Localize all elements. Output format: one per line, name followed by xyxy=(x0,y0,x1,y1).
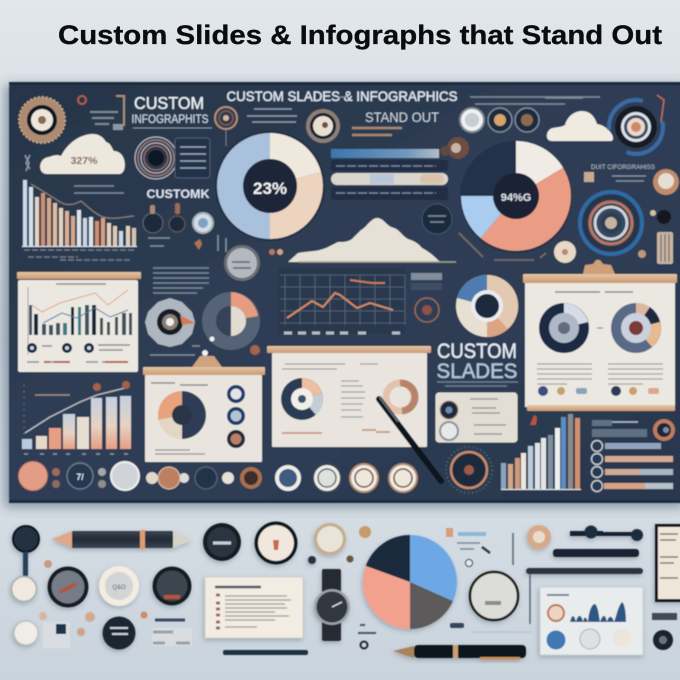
bottom badge row xyxy=(18,462,262,490)
ring badges xyxy=(274,464,417,492)
heading: custom infographics: CUSTOM xyxy=(134,93,204,113)
card: centre-left donut xyxy=(143,350,265,462)
tray: small bottom-right parts xyxy=(652,613,677,650)
mountain chart xyxy=(288,204,456,262)
data strip panel xyxy=(331,97,600,200)
heading: custom slides: SLADES xyxy=(436,360,518,383)
heading: custom slides: CUSTOM xyxy=(437,340,517,363)
donut chart: multi colour xyxy=(456,275,518,337)
tray: chart card xyxy=(540,587,643,655)
heading: custom slides & infographics: CUSTOM SLADES & INFOGRAPHICS xyxy=(226,89,458,104)
horizontal bars xyxy=(592,419,675,492)
chart label box xyxy=(411,273,442,290)
label: customk: CUSTOMK xyxy=(146,189,210,201)
icon: large ring dial xyxy=(306,109,340,143)
tray: magnifier lens xyxy=(470,572,518,620)
main donut chart 23%: 23% xyxy=(253,179,287,198)
tray: large fountain pen xyxy=(393,645,526,660)
card: centre donuts xyxy=(267,346,431,447)
text lines under heading xyxy=(247,109,297,122)
icon: ring xyxy=(415,298,439,322)
heading: custom infographics xyxy=(132,93,212,128)
tray: large dials xyxy=(48,522,346,650)
tray: tube xyxy=(52,530,192,549)
metal dial xyxy=(224,245,283,281)
bar chart: bottom left xyxy=(22,381,131,454)
cloud with percentage xyxy=(40,134,125,174)
heading: stand out: STAND OUT xyxy=(365,109,439,125)
line chart xyxy=(278,268,406,334)
small icon column xyxy=(148,235,226,252)
icon: copper ring dial xyxy=(215,107,237,146)
small connector marks xyxy=(459,233,546,260)
pen on card xyxy=(379,397,441,481)
cloud top right xyxy=(547,111,613,141)
label right of pie: DUIT CIFORGRAHISS xyxy=(591,164,656,171)
tray: text sheet xyxy=(205,577,303,638)
spiral dial xyxy=(135,137,177,179)
small pictogram xyxy=(25,155,30,171)
heading: custom infographics: INFOGRAPHITS xyxy=(132,114,209,126)
bar chart: bottom right xyxy=(501,414,581,490)
icon: brown knob xyxy=(440,137,469,159)
pie chart top right xyxy=(460,141,572,253)
heading: custom slides xyxy=(436,340,518,386)
three badge icons xyxy=(460,108,539,132)
tan button xyxy=(554,241,576,263)
icon: top-left gear dial xyxy=(19,97,65,143)
tray: framed document xyxy=(655,524,680,602)
tray: left column dials xyxy=(12,526,39,645)
tray: small items around pie xyxy=(346,526,532,648)
text block under gauges xyxy=(153,268,209,293)
tray: large pie chart xyxy=(363,535,457,629)
small dark info panel xyxy=(175,138,210,178)
dial chart xyxy=(150,292,260,355)
tray: pens top right xyxy=(526,525,643,574)
gear icon xyxy=(145,298,195,347)
small top-left icons xyxy=(78,96,124,130)
tray: small scattered items xyxy=(39,560,192,648)
bar chart: top left xyxy=(22,180,137,260)
target dial xyxy=(609,95,664,154)
card: two donuts xyxy=(523,260,677,411)
card: top-left chart xyxy=(17,272,141,372)
cloud with percentage: 327% xyxy=(71,155,98,167)
tray: large dials: Q&O xyxy=(112,585,126,591)
main donut chart 23% xyxy=(215,131,325,241)
peach ring xyxy=(584,169,679,195)
pie chart top right: 94%G xyxy=(501,192,531,204)
right side icons xyxy=(638,210,673,264)
concentric rings xyxy=(580,192,642,254)
bottom badge row: 7/ xyxy=(76,472,84,482)
gauge with copper arc xyxy=(446,447,492,493)
small gauge icons xyxy=(143,203,213,250)
title: Custom Slides & Infographs that Stand Out xyxy=(58,20,662,50)
tray: thin pen xyxy=(223,650,308,655)
tray: wristwatch xyxy=(314,569,350,641)
small card xyxy=(435,392,518,443)
